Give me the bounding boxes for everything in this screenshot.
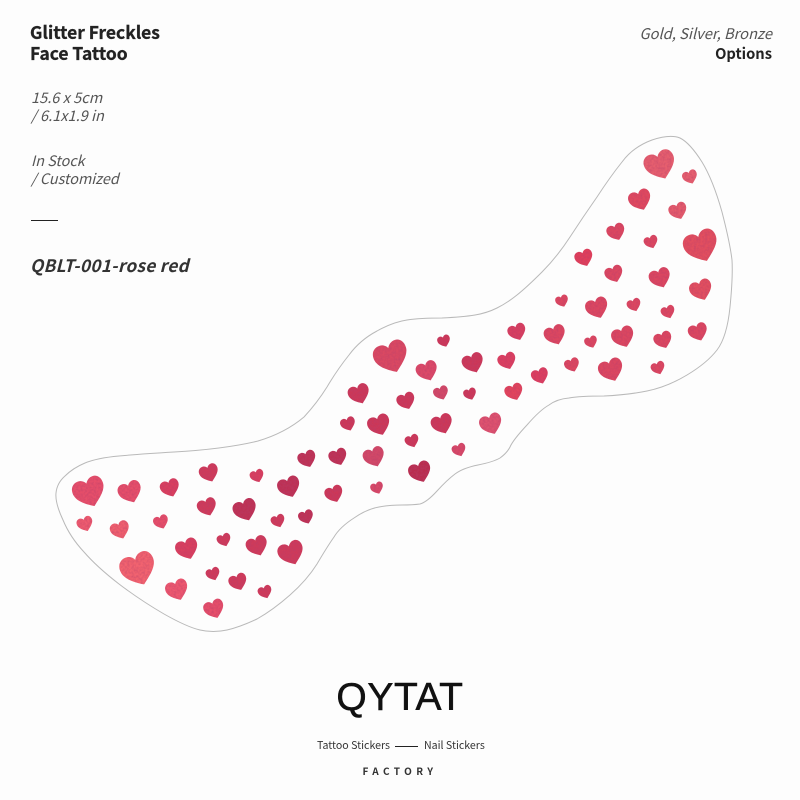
stock text block bbox=[30, 150, 120, 189]
short divider line bbox=[31, 220, 58, 221]
tagline connector bbox=[395, 746, 418, 747]
product code: QBLT-001-rose red bbox=[30, 252, 189, 277]
tagline left: Tattoo Stickers bbox=[317, 738, 390, 753]
stock text block: In Stock bbox=[31, 150, 85, 171]
title: Glitter Freckles bbox=[30, 20, 160, 45]
brand logo: QYTAT bbox=[336, 676, 464, 719]
options text block bbox=[639, 23, 773, 64]
size text block bbox=[30, 87, 104, 126]
title bbox=[30, 20, 160, 66]
stock text block: / Customized bbox=[31, 168, 119, 189]
hearts: middle band bbox=[296, 322, 551, 505]
size text block: 15.6 x 5cm bbox=[31, 87, 102, 108]
options text block: Options bbox=[715, 43, 772, 64]
factory label: FACTORY bbox=[362, 763, 438, 778]
sheet outline bbox=[56, 136, 732, 632]
size text block: / 6.1x1.9 in bbox=[31, 105, 104, 126]
tagline right: Nail Stickers bbox=[424, 738, 485, 753]
options text block: Gold, Silver, Bronze bbox=[639, 23, 772, 44]
hearts: left lobe bbox=[69, 462, 315, 621]
brand tagline bbox=[317, 738, 485, 753]
hearts: right lobe bbox=[542, 147, 722, 385]
title: Face Tattoo bbox=[30, 41, 128, 66]
